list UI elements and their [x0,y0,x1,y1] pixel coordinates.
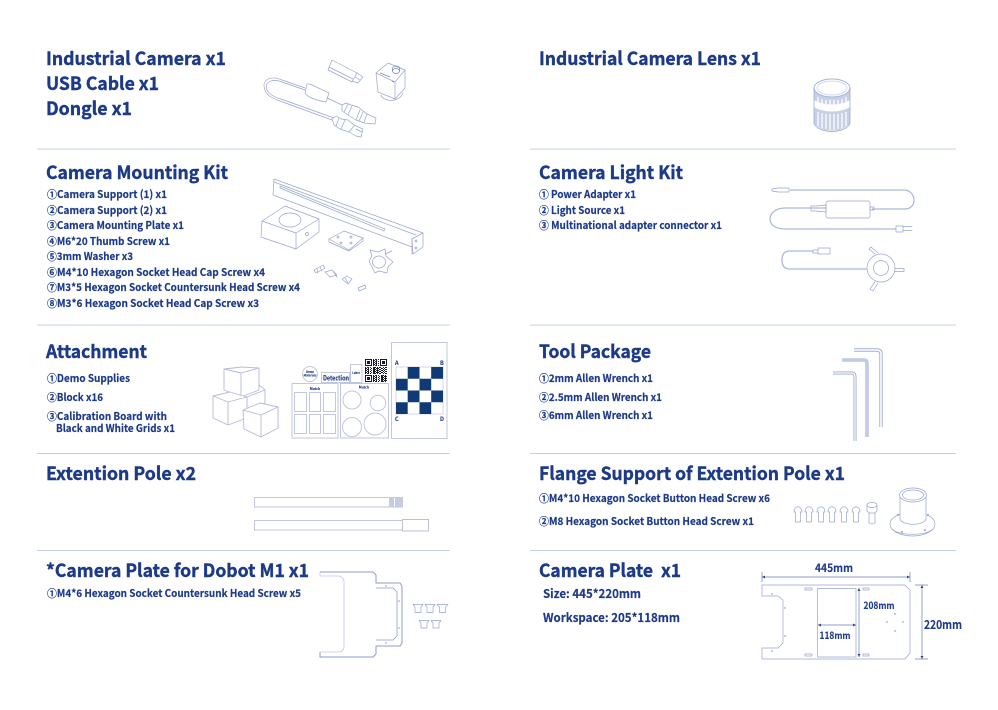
list: attachment items: ③Calibration Board with [47,409,167,424]
list: mounting kit parts: ④M6*20 Thumb Screw x1 [47,234,170,249]
icon: power adapter [770,188,914,232]
icon: extension pole with thread [254,498,403,507]
icon: USB dongle [328,60,363,83]
icon: blocks [213,367,278,437]
heading: attachment: Attachment [45,338,147,364]
icon: camera support block [261,206,319,249]
diagram: camera plate dimensions [762,560,962,659]
heading: camera, cable, dongle: Industrial Camera x1 [46,45,226,71]
list: light kit parts [539,187,722,233]
icon: calibration board: B [440,359,444,367]
icon: countersunk screws [413,604,448,628]
list: allen wrenches: ①2mm Allen Wrench x1 [539,371,653,386]
icon: M8 screw [867,502,877,524]
icon: extension pole with sleeve [254,520,428,531]
icon: demo sticker sheet: Label [352,371,360,375]
icon: button head screws [794,507,860,522]
list: mounting kit parts: ③Camera Mounting Plate x1 [47,218,184,233]
icon: QR code [364,358,388,383]
heading: flange support: Flange Support of Extention Pole x1 [539,460,845,486]
list: allen wrenches: ③6mm Allen Wrench x1 [539,408,653,423]
list: attachment items: ②Block x16 [47,390,103,405]
panel: tool package [539,338,881,441]
icon: demo sticker sheet [292,364,388,438]
panel: industrial camera lens [539,45,850,132]
icon: camera support rail [273,179,423,254]
panel: industrial camera [46,45,405,137]
heading: camera plate: Camera Plate x1 [539,557,681,583]
panel: camera plate [539,557,962,659]
icon: camera lens [814,79,850,132]
diagram: camera plate dimensions: 220mm [924,616,962,633]
icon: demo sticker sheet: Demo [306,370,314,374]
heading: tool package: Tool Package [539,338,651,364]
list: allen wrenches [539,371,662,423]
list: mounting kit parts [47,187,300,311]
list: light kit parts: ③ Multinational adapter connector x1 [539,218,722,233]
list: allen wrenches: ②2.5mm Allen Wrench x1 [539,390,662,405]
heading: camera, cable, dongle: USB Cable x1 [46,70,159,96]
list: attachment items [47,371,175,436]
icon: calibration board [392,342,447,438]
list: mounting kit parts: ⑧M3*6 Hexagon Socket Head Cap Screw x3 [47,296,259,311]
icon: flange support [890,488,935,536]
heading: camera light kit: Camera Light Kit [539,159,683,185]
icon: M1 camera plate [320,572,402,657]
list: light kit parts: ② Light Source x1 [539,203,625,218]
panel: camera mounting kit [46,159,423,311]
list: mounting kit parts: ②Camera Support (2) x1 [47,203,167,218]
text: plate size: Size: 445*220mm [543,585,641,602]
list: flange screws: ①M4*10 Hexagon Socket Button Head Screw x6 [539,491,770,506]
icon: mounting plate [329,231,363,251]
list: mounting kit parts: ⑦M3*5 Hexagon Socket Countersunk Head Screw x4 [47,280,300,295]
list: attachment items: ①Demo Supplies [47,371,130,386]
heading: camera, cable, dongle: Dongle x1 [46,95,132,121]
panel: flange support [539,460,935,536]
list: mounting kit parts: ⑥M4*10 Hexagon Socket Head Cap Screw x4 [47,265,265,280]
icon: calibration board: C [395,415,399,423]
panel: attachment [45,338,447,438]
icon: thumb screw [369,249,393,273]
icon: light source [782,247,904,291]
icon: demo sticker sheet: Match [359,386,369,390]
diagram: camera plate dimensions: 118mm [820,627,850,642]
heading: camera plate for M1: *Camera Plate for Dobot M1 x1 [46,557,309,583]
list: flange screws: ②M8 Hexagon Socket Button Head Screw x1 [539,514,754,529]
icon: demo sticker sheet: Materials [304,374,317,378]
diagram: camera plate dimensions: 208mm [864,597,894,612]
panel: camera plate for Dobot M1 [46,557,448,657]
icon: industrial camera [376,63,405,100]
text: M1 plate screws: ①M4*6 Hexagon Socket Countersunk Head Screw x5 [47,586,301,601]
text: workspace size: Workspace: 205*118mm [543,609,680,626]
heading: lens: Industrial Camera Lens x1 [539,45,761,71]
list: mounting kit parts: ①Camera Support (1) x1 [47,187,167,202]
panel: extension pole [46,460,428,531]
heading: extension pole: Extention Pole x2 [46,460,196,486]
icon: allen wrenches [833,350,881,441]
list: light kit parts: ① Power Adapter x1 [539,187,636,202]
diagram: camera plate dimensions: 445mm [815,560,853,576]
heading: camera, cable, dongle [46,45,226,121]
list: flange screws [539,491,770,529]
list: attachment items: Black and White Grids x1 [56,421,175,436]
list: mounting kit parts: ⑤3mm Washer x3 [47,249,133,264]
heading: camera mounting kit: Camera Mounting Kit [46,159,228,185]
icon: calibration board: D [440,415,444,423]
panel: camera light kit [539,159,914,291]
icon: calibration board: A [394,359,399,367]
icon: USB cable [264,78,376,137]
icon: demo sticker sheet: Detection [323,374,349,384]
icon: small screws and washers [314,265,366,291]
icon: demo sticker sheet: Match [310,387,320,392]
